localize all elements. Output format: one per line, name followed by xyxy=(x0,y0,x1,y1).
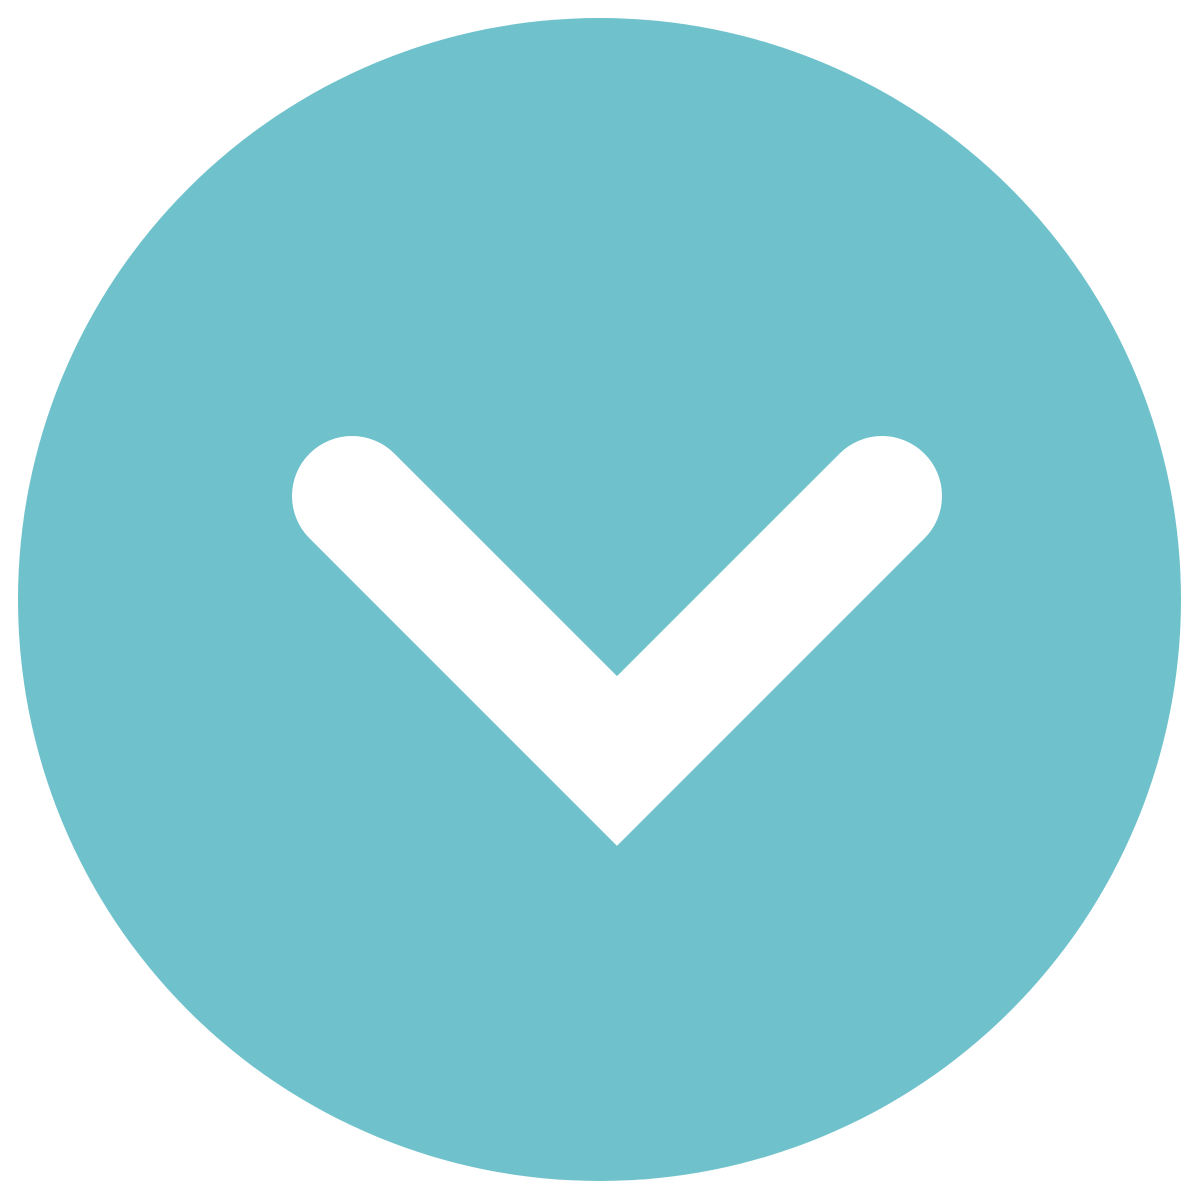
chevron arrow xyxy=(352,496,882,761)
